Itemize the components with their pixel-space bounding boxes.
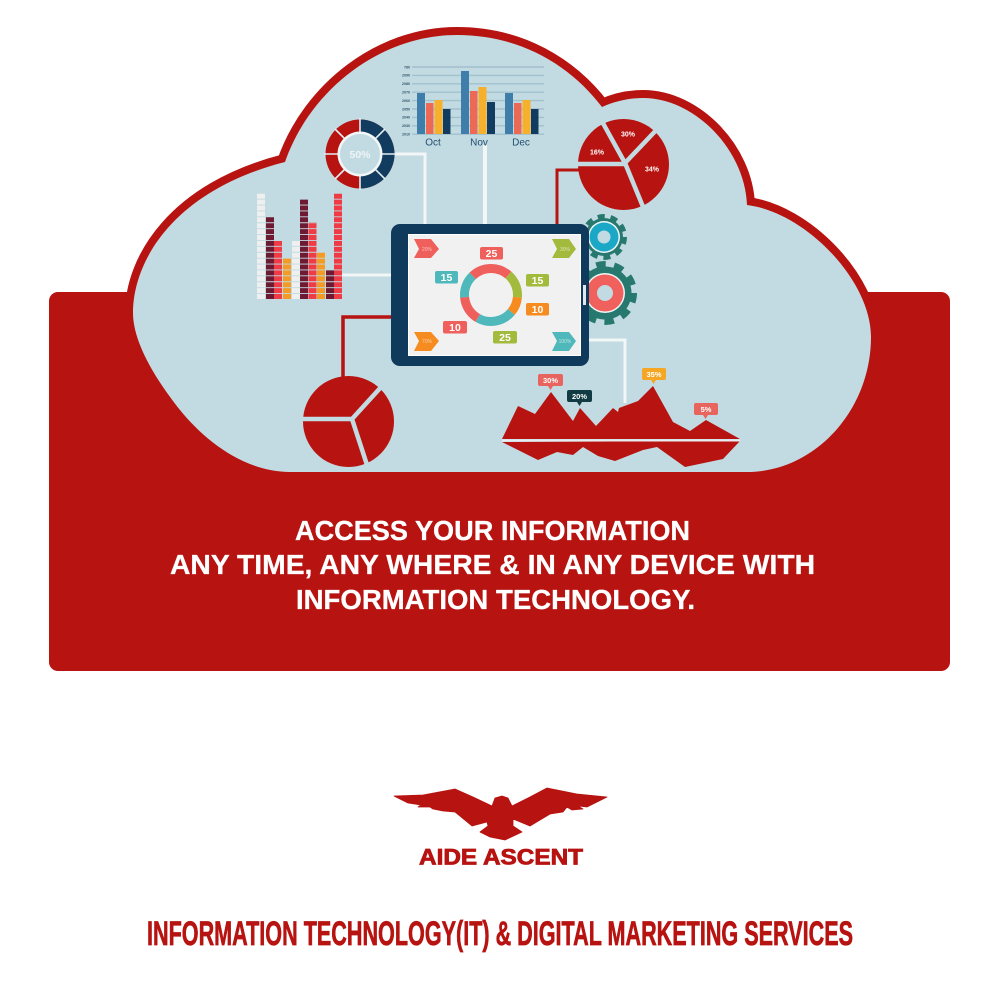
percent tags: 35% [646,370,662,379]
logo: eagle [394,788,607,840]
bar chart: Oct Nov Dec: 2060 [402,99,410,103]
cloud shape [133,35,871,472]
value pills: 25 [499,332,511,344]
bar chart: Oct Nov Dec: 2080 [402,82,410,86]
value pills: 10 [449,322,461,334]
icon: gears [576,216,634,322]
pie chart: top right [574,116,669,214]
main message text: INFORMATION TECHNOLOGY. [296,584,695,615]
main message text: ACCESS YOUR INFORMATION [295,515,690,546]
connector lines [342,145,625,403]
tablet [391,224,589,366]
value pills: 25 [486,248,497,260]
bar chart: Oct Nov Dec: 2030 [402,124,410,128]
chevron tags: 20% [422,247,433,253]
donut chart: 50% [324,118,396,190]
value pills [435,247,549,344]
logo wordmark: AIDE ASCENT [419,844,584,870]
bar chart: Oct Nov Dec [402,65,544,148]
ring chart [464,268,518,322]
percent tags: 20% [572,392,587,401]
chevron tags: 100% [559,339,572,345]
bar chart: Oct Nov Dec: 2070 [402,90,410,94]
bar chart: Oct Nov Dec: Nov [470,138,488,148]
bar chart: Oct Nov Dec: 2050 [402,107,410,111]
percent tags: 30% [543,376,558,385]
bar chart: Oct Nov Dec: Dec [512,138,530,148]
pie chart: bottom left [298,376,394,468]
bar chart: Oct Nov Dec: 2040 [402,116,410,120]
chevron tags [414,239,576,351]
area chart with tags [502,368,740,467]
bar chart: Oct Nov Dec: 780 [404,65,410,69]
value pills: 15 [532,275,543,287]
main message text [170,515,815,615]
percent tags: 5% [701,405,712,414]
percent tags [538,368,718,419]
main message text: ANY TIME, ANY WHERE & IN ANY DEVICE WITH [170,549,815,580]
panel: red background [49,292,950,671]
pie chart: top right: 30% [621,132,636,138]
pixel bar chart [261,193,338,299]
bar chart: Oct Nov Dec: Oct [425,138,441,148]
pie chart: top right: 34% [645,166,660,174]
pie chart: top right: 16% [590,150,605,156]
chevron tags: 70% [422,339,433,345]
value pills: 10 [532,304,543,316]
bar chart: Oct Nov Dec: 2090 [402,74,410,78]
donut chart: 50%: 50% [349,149,371,161]
chevron tags: 30% [560,247,571,253]
value pills: 15 [441,272,452,284]
bar chart: Oct Nov Dec: 2010 [402,132,410,136]
